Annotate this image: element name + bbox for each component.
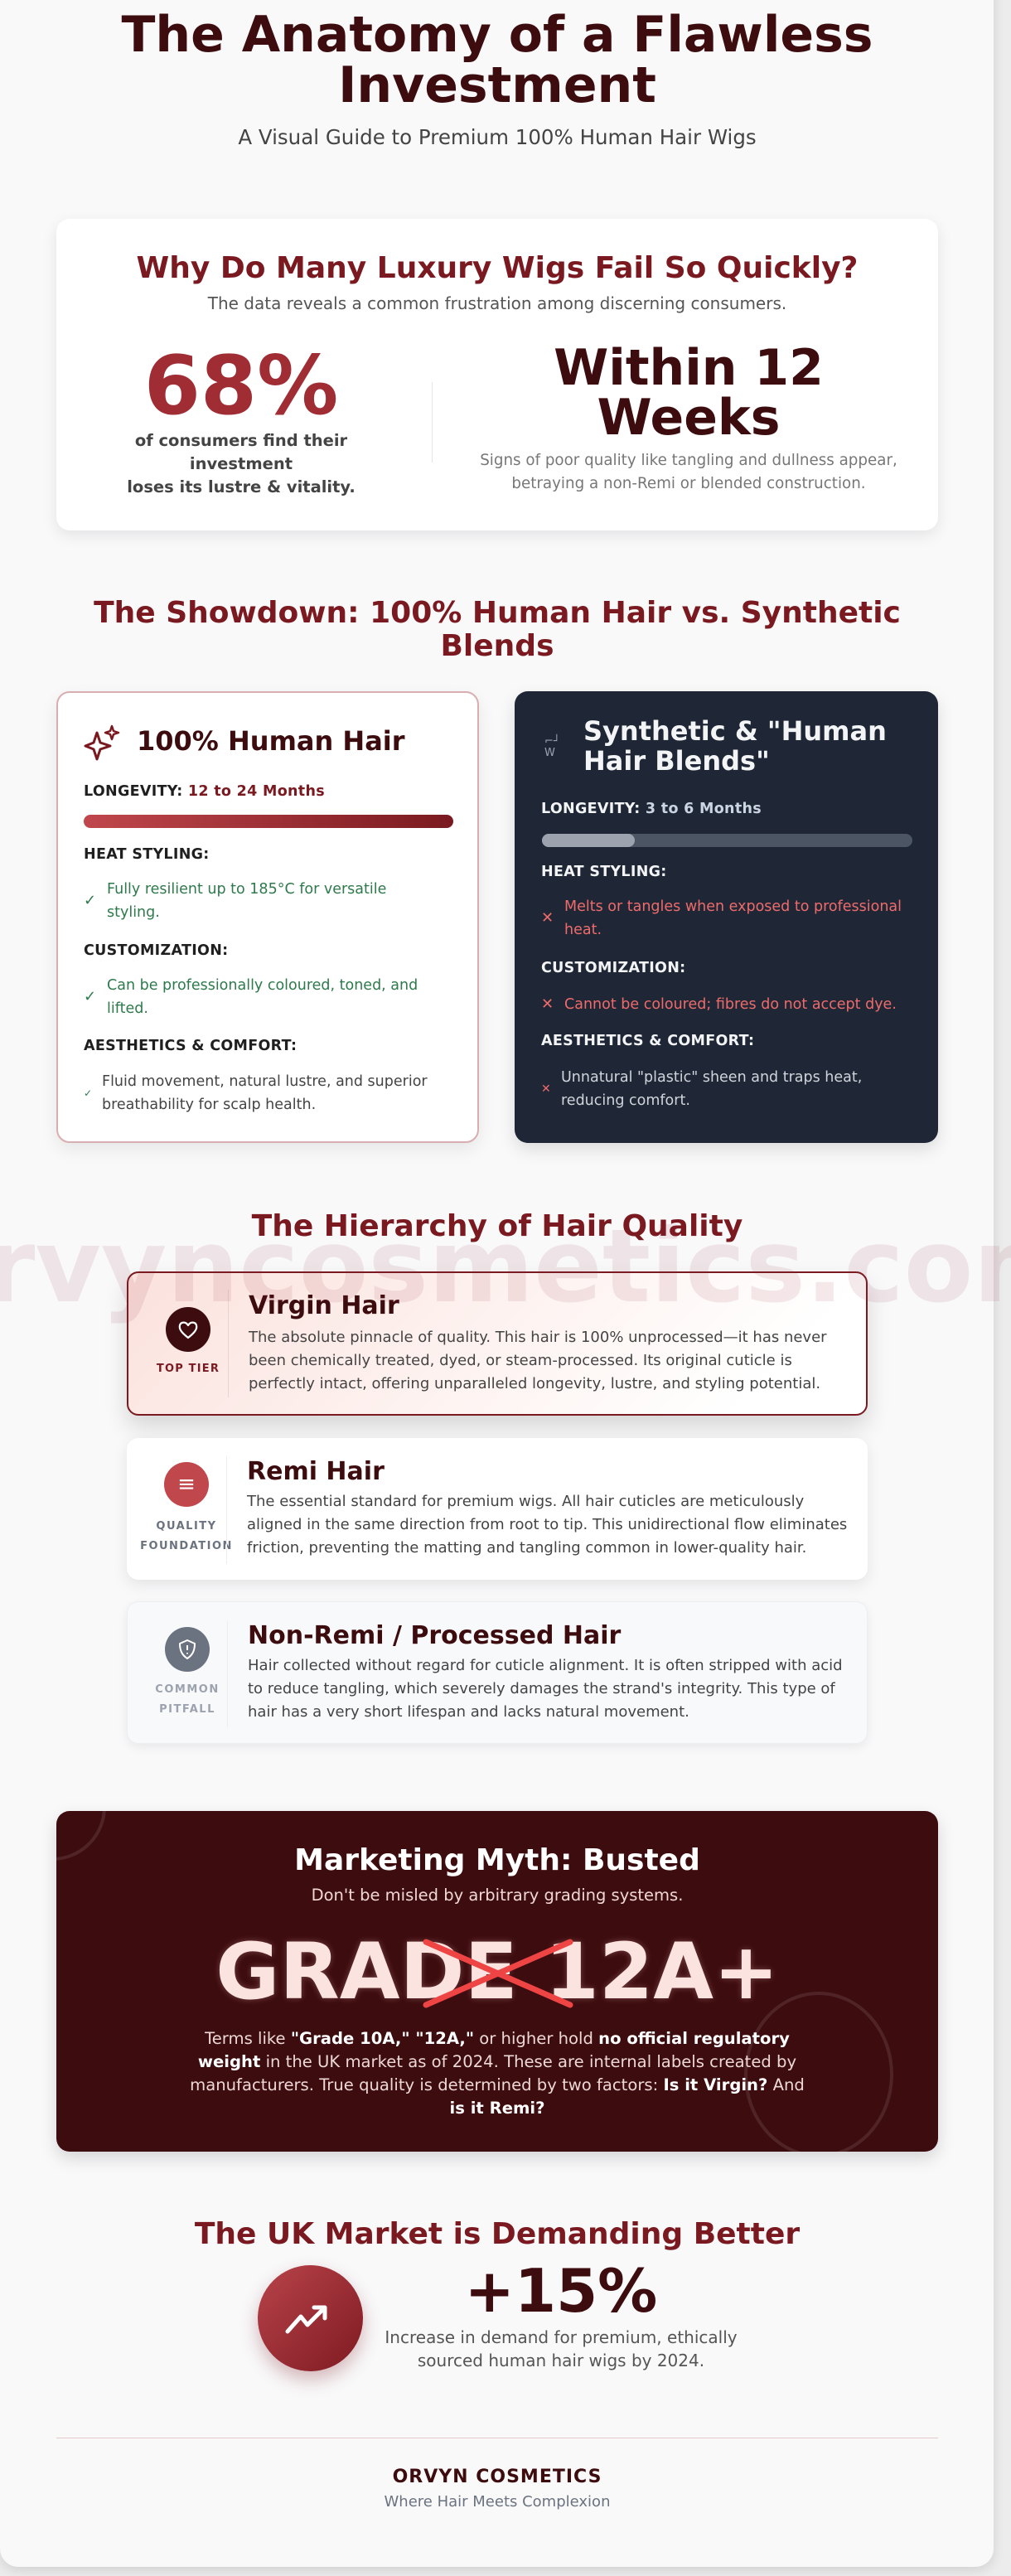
stat: within 12 weeks: Within 12 (554, 339, 824, 397)
panel: why wigs fail (56, 219, 938, 530)
icon: red cross (423, 1939, 573, 2007)
heading: uk market: The UK Market is Demanding Better (195, 2217, 800, 2251)
panel: synthetic (515, 691, 938, 1143)
heat styling: HEAT STYLING: (84, 846, 210, 863)
panel: synthetic: Unnatural "plastic" sheen and traps heat, reducing comfort. (561, 1069, 862, 1109)
tier title: Non-Remi / Processed Hair (248, 1621, 621, 1650)
heading: Marketing Myth: Busted (294, 1843, 700, 1877)
stat: 68%: of consumers find their investment (135, 431, 347, 473)
icon: synthetic (544, 734, 560, 759)
stat: +15% (385, 2256, 738, 2370)
card title: 100% Human Hair (137, 725, 405, 757)
footer: ORVYN COSMETICS (393, 2467, 602, 2487)
title: Investment (338, 56, 656, 114)
panel: virgin hair (127, 1271, 868, 1416)
customization: CUSTOMIZATION: (541, 960, 685, 976)
stat: +15%: +15% (465, 2256, 657, 2326)
heading: showdown: Blends (440, 629, 554, 663)
stat: 68%: 68% (144, 339, 338, 433)
tier label (155, 1683, 220, 1716)
panel: human hair: ✓ (84, 892, 96, 909)
tier label: TOP TIER (157, 1363, 220, 1375)
panel: remi hair (127, 1438, 868, 1580)
subheading: The data reveals a common frustration among discerning consumers. (208, 293, 786, 313)
panel: human hair: Fully resilient up to 185°C for versatile styling. (107, 881, 386, 921)
longevity: LONGEVITY: 3 to 6 Months (541, 801, 762, 817)
panel: human hair: Can be professionally coloured, toned, and lifted. (107, 977, 418, 1017)
panel: non-remi (127, 1601, 868, 1744)
tier label: QUALITY (156, 1520, 217, 1533)
tier label: FOUNDATION (140, 1540, 233, 1552)
aesthetics: AESTHETICS & COMFORT: (541, 1033, 754, 1049)
tier text: Hair collected without regard for cuticle alignment. It is often stripped with acid to reduce tangling, which severely damages the strand's integrity. This type of hair has a very short lifespan and lacks natural movement. (248, 1657, 843, 1721)
stat: +15%: sourced human hair wigs by 2024. (418, 2351, 704, 2370)
icon: lines (164, 1462, 209, 1507)
title (121, 6, 873, 114)
tier title: Remi Hair (247, 1457, 385, 1486)
tier text: The essential standard for premium wigs. All hair cuticles are meticulously aligned in the same direction from root to tip. This unidirectional flow eliminates friction, preventing the matting and tangling common in lower-quality hair. (247, 1493, 847, 1557)
longevity: LONGEVITY: 12 to 24 Months (84, 783, 325, 800)
heading: Why Do Many Luxury Wigs Fail So Quickly? (137, 251, 858, 285)
panel: human hair: ✓ (84, 1087, 92, 1099)
title: The Anatomy of a Flawless (121, 6, 873, 64)
footer (385, 2467, 610, 2511)
panel: synthetic: Melts or tangles when exposed to professional heat. (564, 898, 902, 938)
stat: within 12 weeks (480, 339, 897, 492)
bar full (84, 815, 453, 828)
stat: 68%: loses its lustre & vitality. (127, 477, 356, 496)
card title: Synthetic & "Human (583, 715, 887, 747)
icon: heart (166, 1307, 210, 1352)
aesthetics: AESTHETICS & COMFORT: (84, 1038, 297, 1054)
icon: lines: ≡ (177, 1472, 196, 1497)
subheading: Don't be misled by arbitrary grading systems. (312, 1886, 683, 1905)
panel: human hair: Fluid movement, natural lustre, and superior breathability for scalp health. (102, 1073, 428, 1113)
stat: within 12 weeks: betraying a non-Remi or blended construction. (511, 475, 866, 492)
panel: synthetic: ✕ (541, 995, 554, 1013)
icon: shield (165, 1627, 210, 1672)
icon: sparkles (84, 724, 119, 761)
tier title: Virgin Hair (249, 1291, 399, 1320)
panel: synthetic: ✕ (541, 909, 554, 927)
panel: synthetic: ✕ (541, 1082, 551, 1096)
tier label: PITFALL (159, 1703, 215, 1716)
grade graphic: GRADE 12A+ (215, 1927, 779, 2017)
panel: human hair: ✓ (84, 988, 96, 1005)
tier label: COMMON (155, 1683, 220, 1696)
card title (583, 715, 887, 777)
stat: 68% (127, 339, 356, 496)
stat: within 12 weeks: Weeks (597, 389, 781, 447)
myth text: Terms like "Grade 10A," "12A," or higher hold no official regulatory weight in the UK market as of 2024. These are internal labels created by manufacturers. True quality is determined by two factors: Is it Virgin? And is it Remi? (190, 2029, 805, 2118)
heat styling: HEAT STYLING: (541, 864, 667, 880)
tier label (140, 1520, 233, 1552)
panel: synthetic: Cannot be coloured; fibres do not accept dye. (564, 996, 897, 1013)
bar short (542, 834, 912, 847)
stat: within 12 weeks: Signs of poor quality like tangling and dullness appear, (480, 452, 897, 469)
stat: +15%: Increase in demand for premium, ethically (385, 2327, 738, 2347)
panel: marketing myth (56, 1811, 938, 2152)
icon: trending circle (258, 2265, 363, 2371)
card title: Hair Blends" (583, 745, 770, 777)
heading: showdown (94, 596, 901, 663)
heading: hierarchy: The Hierarchy of Hair Quality (252, 1209, 743, 1243)
tier text: The absolute pinnacle of quality. This hair is 100% unprocessed—it has never been chemically treated, dyed, or steam-processed. Its original cuticle is perfectly intact, offering unparalleled longevity, lustre, and styling potential. (249, 1329, 827, 1392)
customization: CUSTOMIZATION: (84, 942, 228, 959)
icon: synthetic: ⌐┘ (544, 735, 560, 748)
panel: human hair (56, 691, 479, 1143)
icon: synthetic: W (544, 747, 555, 759)
heading: showdown: The Showdown: 100% Human Hair vs. Synthetic (94, 596, 901, 630)
subtitle: A Visual Guide to Premium 100% Human Hair Wigs (238, 125, 757, 149)
footer: Where Hair Meets Complexion (385, 2493, 610, 2511)
